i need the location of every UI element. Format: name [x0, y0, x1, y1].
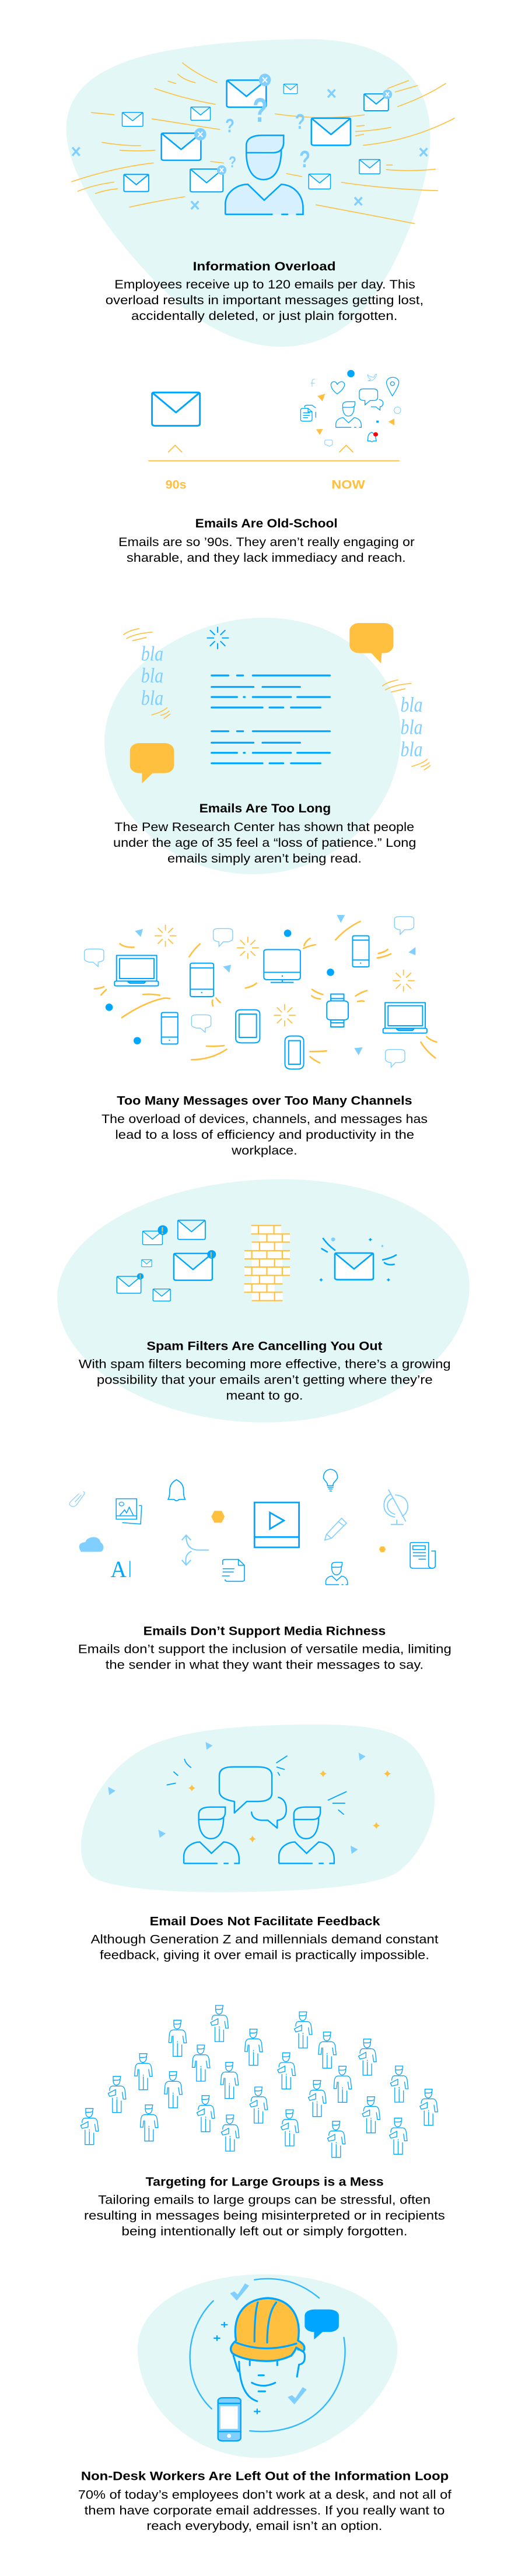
bla bla text: bla: [400, 737, 422, 761]
text: too many messages: Too Many Messages over Too Many Channels: [117, 1093, 412, 1107]
exclamation marks: !: [139, 1273, 141, 1280]
text: emails are old-school: Emails Are Old-School: [195, 516, 338, 530]
panel: emails are too long: [104, 618, 430, 874]
question marks: ?: [295, 110, 305, 133]
illustration: person overloaded by emails: [72, 63, 454, 224]
bla bla text: bla: [400, 693, 422, 716]
background blob: [81, 1725, 435, 1892]
question marks: ?: [225, 115, 235, 136]
background blob: [66, 39, 430, 347]
background blob: [138, 2274, 397, 2458]
timeline labels: NOW: [331, 478, 365, 492]
bla bla text: bla: [141, 642, 163, 665]
text: too many messages: [102, 1093, 428, 1157]
text: non-desk workers: Non-Desk Workers Are Left Out of the Information Loop: [81, 2469, 449, 2483]
panel: media richness: [69, 1469, 452, 1672]
question marks: ?: [253, 92, 268, 129]
text: emails are too long: emails simply aren’t being read.: [167, 851, 362, 865]
text: spam filters: meant to go.: [226, 1389, 303, 1403]
text: feedback: [91, 1914, 439, 1962]
text: media richness: [78, 1624, 452, 1672]
bla bla text: bla: [400, 715, 422, 738]
exclamation marks: [139, 1225, 212, 1280]
text: emails are old-school: [118, 516, 415, 565]
panel: large groups: [80, 2005, 445, 2239]
illustration: timeline from 90s envelope to now: [149, 370, 401, 461]
text: emails are too long: The Pew Research Center has shown that people: [114, 820, 414, 834]
timeline labels: 90s: [166, 478, 187, 492]
timeline labels: [166, 478, 365, 492]
text: spam filters: With spam filters becoming more effective, there’s a growing: [79, 1357, 451, 1371]
text: feedback: Email Does Not Facilitate Feedback: [150, 1914, 380, 1928]
text: non-desk workers: reach everybody, email isn’t an option.: [146, 2519, 382, 2533]
text: too many messages: workplace.: [231, 1143, 298, 1157]
question marks: ?: [299, 146, 310, 173]
illustration: worker in hard hat with phone: [190, 2279, 345, 2441]
text: feedback: feedback, giving it over email is practically impossible.: [100, 1948, 429, 1962]
background blob: [104, 618, 401, 874]
text: information overload: Employees receive up to 120 emails per day. This: [114, 277, 415, 291]
text: spam filters: Spam Filters Are Cancelling You Out: [146, 1339, 382, 1353]
text: emails are too long: [113, 801, 416, 865]
panel: information overload: [66, 39, 454, 347]
text: emails are too long: under the age of 35 feel a “loss of patience.” Long: [113, 836, 416, 850]
bla bla text: bla: [141, 686, 163, 709]
text: large groups: [84, 2174, 445, 2239]
text: information overload: Information Overload: [193, 259, 336, 273]
text: too many messages: lead to a loss of efficiency and productivity in the: [116, 1128, 414, 1142]
letter A: A: [111, 1556, 127, 1582]
bla bla text: [141, 642, 422, 761]
illustration: two people talking: [108, 1742, 391, 1863]
panel: feedback: [81, 1725, 439, 1962]
illustration: media icons: [69, 1469, 435, 1585]
question marks: [225, 92, 310, 173]
text: information overload: overload results in important messages getting lost,: [106, 293, 424, 307]
exclamation marks: !: [210, 1250, 212, 1259]
text: non-desk workers: them have corporate email addresses. If you really want to: [85, 2503, 444, 2517]
text: media richness: Emails don’t support the inclusion of versatile media, limiting: [78, 1642, 452, 1656]
illustration: crowd of people: [80, 2005, 438, 2158]
illustration: long email with bla bla: [124, 623, 430, 783]
panel: emails are old-school: [118, 370, 415, 565]
text: large groups: being intentionally left out or simply forgotten.: [121, 2225, 408, 2239]
background blob: [57, 1179, 470, 1423]
question marks: ?: [229, 153, 236, 171]
panel: non-desk workers: [78, 2274, 452, 2533]
illustration: scattered devices: [85, 915, 436, 1069]
text: emails are old-school: Emails are so ’90s. They aren’t really engaging or: [118, 535, 415, 549]
exclamation marks: !: [161, 1225, 164, 1236]
panel: too many messages over too many channels: [85, 915, 436, 1157]
panel: spam filters: [57, 1179, 470, 1423]
text: large groups: Tailoring emails to large groups can be stressful, often: [98, 2193, 430, 2207]
illustration: emails hitting a brick wall: [117, 1220, 396, 1301]
text: information overload: [106, 259, 424, 323]
text: large groups: resulting in messages being misinterpreted or in recipients: [84, 2209, 445, 2223]
text: non-desk workers: 70% of today’s employees don’t work at a desk, and not all of: [78, 2487, 452, 2501]
text: emails are too long: Emails Are Too Long: [200, 801, 331, 815]
text: emails are old-school: sharable, and they lack immediacy and reach.: [127, 551, 406, 565]
text: information overload: accidentally deleted, or just plain forgotten.: [131, 309, 397, 323]
text: media richness: the sender in what they want their messages to say.: [106, 1658, 424, 1672]
text: large groups: Targeting for Large Groups is a Mess: [146, 2174, 384, 2188]
text: non-desk workers: [78, 2469, 452, 2533]
text: too many messages: The overload of devices, channels, and messages has: [102, 1112, 428, 1126]
text: spam filters: [79, 1339, 451, 1403]
bla bla text: bla: [141, 664, 163, 687]
text: media richness: Emails Don’t Support Media Richness: [144, 1624, 386, 1638]
text: spam filters: possibility that your emails aren’t getting where they’re: [97, 1373, 433, 1387]
text: feedback: Although Generation Z and millennials demand constant: [91, 1933, 439, 1947]
